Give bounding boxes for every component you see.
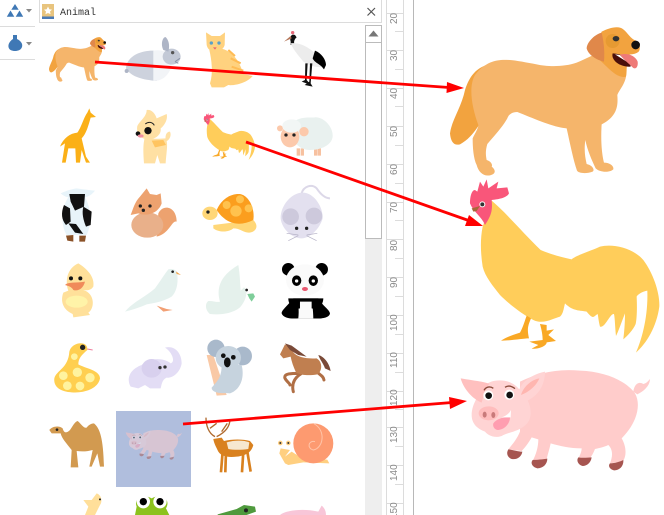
library icon: rooster xyxy=(204,113,255,160)
vertical ruler: 20 xyxy=(389,12,400,24)
scrollbar xyxy=(365,26,382,515)
library icon: sheep xyxy=(277,117,333,156)
icon: deer xyxy=(206,418,253,472)
selected cell highlight xyxy=(116,411,191,487)
vertical ruler: 90 xyxy=(389,276,400,288)
vertical ruler: 50 xyxy=(389,125,400,137)
vertical ruler: 30 xyxy=(389,49,400,61)
icon: gecko xyxy=(83,493,101,515)
vertical ruler: 40 xyxy=(389,87,400,99)
icon: brown horse xyxy=(280,343,331,392)
large illustration: rooster xyxy=(470,179,659,353)
icon: snail xyxy=(278,423,333,465)
arrow: rooster icon to large rooster xyxy=(246,142,483,226)
library icon: dog xyxy=(49,37,106,82)
vertical ruler: 120 xyxy=(389,389,400,406)
library icons: row five and six xyxy=(49,340,333,515)
library icon: cat xyxy=(206,32,253,87)
icon: fox xyxy=(131,188,177,238)
large illustration: pig xyxy=(461,370,650,470)
vertical ruler: 60 xyxy=(389,163,400,175)
large illustration: dog xyxy=(450,27,640,176)
icon: cow xyxy=(61,188,95,242)
library panel icon xyxy=(42,4,54,19)
vertical ruler xyxy=(386,0,414,515)
library icon: giraffe xyxy=(60,108,96,163)
library icon: crane xyxy=(284,31,326,87)
icon: snake xyxy=(54,343,100,392)
icon: mouse xyxy=(281,186,330,241)
library icon: rabbit xyxy=(125,37,181,81)
vertical ruler: 110 xyxy=(389,352,400,368)
library icon: fawn xyxy=(136,110,171,163)
library icons: row three and four xyxy=(61,186,330,319)
vertical ruler: 130 xyxy=(389,426,400,443)
icon: duckling xyxy=(62,263,94,317)
library icon: selected pig xyxy=(126,430,182,460)
arrow: pig icon to large pig xyxy=(183,397,467,424)
toolbar icon: flask xyxy=(8,35,32,51)
icon: white pigeon xyxy=(125,269,181,312)
vertical ruler: 140 xyxy=(389,464,400,481)
icon: panda xyxy=(282,263,330,319)
close button xyxy=(368,8,375,16)
icon: elephant xyxy=(129,347,182,388)
icon: frog xyxy=(135,495,169,515)
icon: turtle xyxy=(202,194,256,233)
panel title: Animal xyxy=(60,7,96,19)
vertical ruler: 100 xyxy=(389,314,400,331)
icon: peace dove xyxy=(206,265,255,314)
icon: camel xyxy=(49,421,104,467)
icon: koala xyxy=(207,340,252,396)
arrow: dog icon to large dog xyxy=(95,62,464,93)
vertical ruler: 70 xyxy=(389,201,400,213)
toolbar icon: shapes triangle xyxy=(7,4,32,17)
icon: crocodile xyxy=(218,505,256,515)
vertical ruler: 80 xyxy=(389,239,400,251)
icon: pink creature xyxy=(280,506,326,515)
